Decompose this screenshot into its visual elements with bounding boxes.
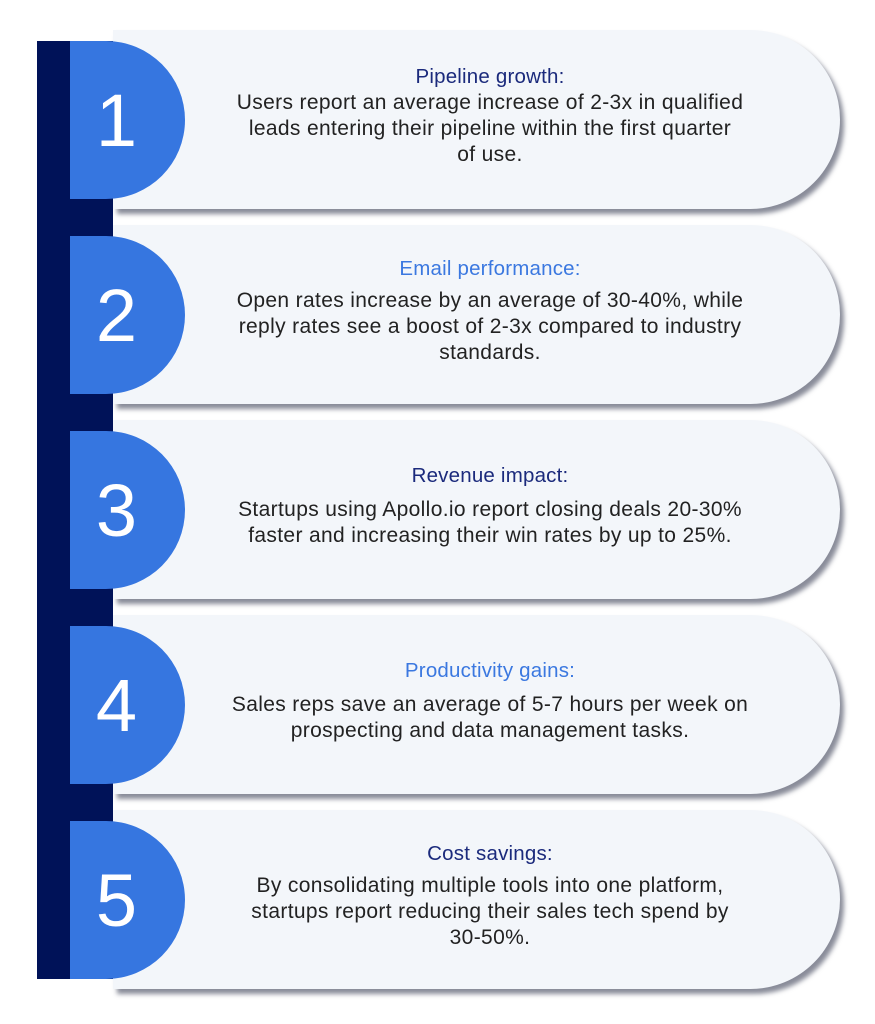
text: productivity gains: Sales reps save an average of 5-7 hours per week on	[232, 692, 748, 716]
text: cost savings: By consolidating multiple tools into one platform,	[257, 874, 723, 896]
text: email performance: Open rates increase by an average of 30-40%, while	[237, 288, 743, 312]
text: pipeline growth: Users report an average increase of 2-3x in qualified	[237, 90, 743, 114]
number tab 1: 1	[96, 78, 137, 162]
navy vertical bar	[37, 41, 113, 979]
panel 2	[113, 225, 840, 404]
text: revenue impact: Startups using Apollo.io report closing deals 20-30%	[238, 498, 742, 520]
number tab 1	[70, 41, 185, 199]
text: revenue impact	[238, 464, 742, 546]
text: cost savings	[251, 842, 729, 948]
panel 3	[113, 420, 840, 599]
text: pipeline growth: Pipeline growth:	[415, 64, 565, 88]
text: cost savings: Cost savings:	[427, 842, 553, 864]
text: cost savings: 30-50%.	[450, 926, 530, 948]
number tab 5: 5	[96, 858, 137, 942]
panel 4	[113, 615, 840, 794]
text: pipeline growth	[237, 64, 743, 166]
text: email performance: Email performance:	[399, 256, 581, 280]
text: revenue impact: faster and increasing their win rates by up to 25%.	[248, 524, 732, 546]
text: pipeline growth: leads entering their pipeline within the first quarter	[249, 116, 731, 140]
number tab 3: 3	[96, 468, 137, 552]
text: productivity gains: Productivity gains:	[405, 658, 575, 682]
number tab 3	[70, 431, 185, 589]
text: email performance: standards.	[439, 340, 541, 364]
text: pipeline growth: of use.	[457, 142, 523, 166]
number tab 2	[70, 236, 185, 394]
text: email performance	[237, 256, 743, 364]
panel 5	[113, 810, 840, 989]
text: email performance: reply rates see a boost of 2-3x compared to industry	[239, 314, 741, 338]
text: productivity gains: prospecting and data management tasks.	[291, 718, 689, 742]
text: cost savings: startups report reducing their sales tech spend by	[251, 900, 729, 922]
number tab 5	[70, 821, 185, 979]
number tab 4	[70, 626, 185, 784]
text: productivity gains	[232, 658, 748, 742]
panel 1	[113, 30, 840, 209]
text: revenue impact: Revenue impact:	[412, 464, 568, 486]
number tab 2: 2	[96, 274, 137, 356]
number tab 4: 4	[96, 664, 137, 746]
